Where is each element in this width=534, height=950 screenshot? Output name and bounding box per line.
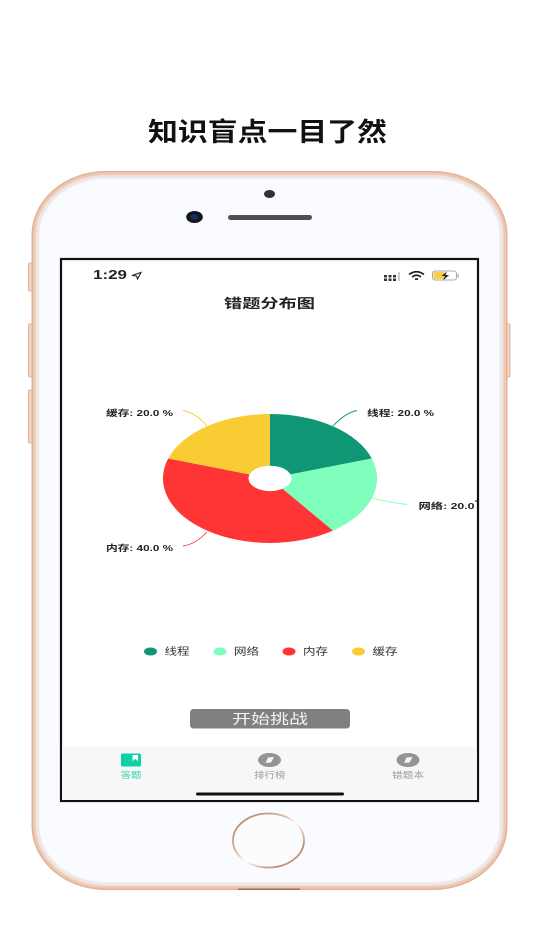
home button bbox=[233, 814, 304, 868]
slice: 线程 bbox=[270, 414, 372, 478]
center hole bbox=[248, 466, 292, 491]
legend: 内存: 内存 bbox=[303, 645, 328, 658]
time: 1:29 bbox=[93, 268, 127, 282]
tab: 排行榜: 排行榜 bbox=[254, 770, 286, 780]
bottom edge mark bbox=[238, 888, 300, 890]
camera bbox=[186, 211, 203, 223]
signal icon bbox=[384, 272, 400, 281]
pie chart bbox=[106, 408, 477, 553]
battery icon bbox=[432, 271, 459, 280]
tab: 答题: 答题 bbox=[120, 770, 142, 780]
legend: 内存 bbox=[282, 645, 328, 658]
slice: 缓存 bbox=[168, 414, 270, 478]
label clip end: ' bbox=[475, 498, 477, 508]
label: 缓存: 缓存: 20.0 % bbox=[106, 408, 174, 418]
legend bbox=[144, 645, 398, 658]
label: 线程: 线程: 20.0 % bbox=[367, 408, 435, 418]
label: 内存: 内存: 40.0 % bbox=[106, 543, 174, 553]
speaker bbox=[228, 215, 312, 220]
legend: 缓存 bbox=[352, 645, 398, 658]
tab: 排行榜 bbox=[254, 753, 286, 780]
front sensor bbox=[264, 190, 275, 198]
tab bar bbox=[62, 747, 477, 800]
tab: 错题本: 错题本 bbox=[392, 770, 425, 780]
start button: 开始挑战 bbox=[232, 711, 308, 727]
slice: 内存 bbox=[163, 458, 333, 543]
legend: 网络: 网络 bbox=[234, 645, 259, 658]
legend: 线程 bbox=[144, 645, 190, 658]
title: 知识盲点一目了然 bbox=[148, 117, 387, 147]
label: 网络: 网络: 20.0 bbox=[418, 501, 475, 511]
wifi icon bbox=[409, 272, 424, 280]
legend: 线程: 线程 bbox=[164, 645, 190, 658]
phone body bbox=[32, 171, 508, 890]
status bar bbox=[93, 268, 459, 282]
start button bbox=[190, 709, 350, 728]
phone frame bbox=[28, 171, 510, 890]
legend: 缓存: 缓存 bbox=[372, 645, 398, 658]
leader lines bbox=[183, 410, 407, 546]
location arrow icon bbox=[132, 272, 141, 279]
tab: 答题 bbox=[120, 754, 142, 780]
page heading: 错题分布图 bbox=[224, 296, 315, 311]
legend: 网络 bbox=[214, 645, 259, 658]
screen bbox=[61, 259, 478, 801]
home indicator bbox=[196, 792, 344, 796]
tab: 错题本 bbox=[392, 753, 425, 780]
slice: 网络 bbox=[270, 458, 377, 531]
side buttons bbox=[28, 263, 510, 443]
